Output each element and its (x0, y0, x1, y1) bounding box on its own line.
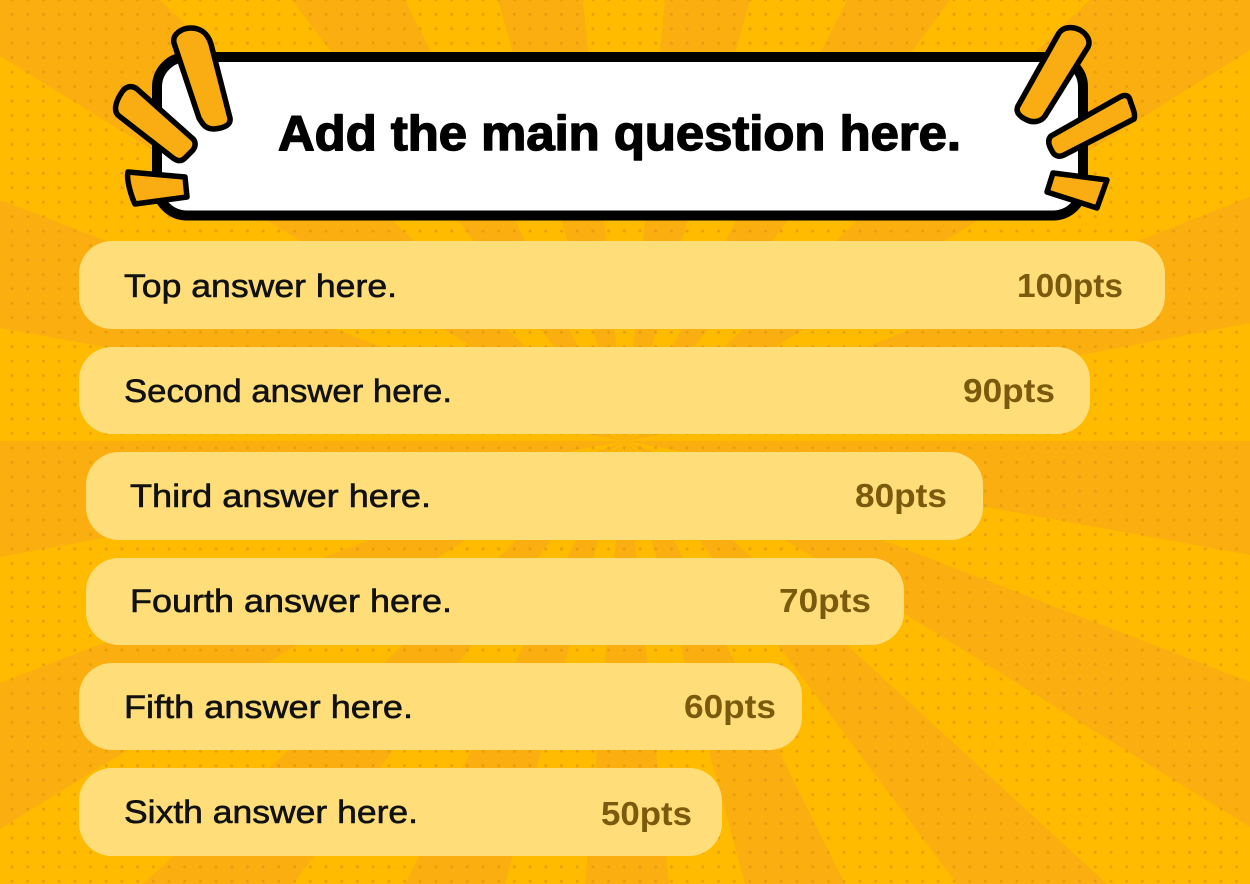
banner box (157, 57, 1083, 216)
panel: question banner (116, 28, 1135, 215)
answer bar: top answer (79, 241, 1165, 329)
title: Add the main question here. (278, 107, 961, 161)
answer bar: second answer (79, 347, 1090, 434)
answer bar: third answer (86, 452, 983, 540)
answer bar: top answer: 100pts (1017, 267, 1123, 304)
answer bar: top answer: Top answer here. (124, 268, 397, 304)
answer bar: second answer: Second answer here. (124, 373, 452, 409)
answer bar: sixth answer: Sixth answer here. (124, 794, 418, 830)
icon: left emphasis marks (116, 28, 230, 204)
answer bar: sixth answer (79, 768, 722, 856)
answer bar: fourth answer: 70pts (779, 582, 871, 619)
icon: right emphasis marks (1017, 28, 1135, 208)
answer bar: sixth answer: 50pts (601, 795, 692, 832)
answer bar: third answer: Third answer here. (130, 478, 431, 514)
answer bar: fifth answer: Fifth answer here. (124, 689, 413, 725)
answer bar: fifth answer (79, 663, 802, 750)
answer bar: fourth answer: Fourth answer here. (130, 583, 452, 619)
answer bar: third answer: 80pts (855, 477, 947, 514)
answer bar: fifth answer: 60pts (684, 688, 776, 725)
answer bar: second answer: 90pts (963, 372, 1055, 409)
answer bar: fourth answer (86, 558, 904, 645)
